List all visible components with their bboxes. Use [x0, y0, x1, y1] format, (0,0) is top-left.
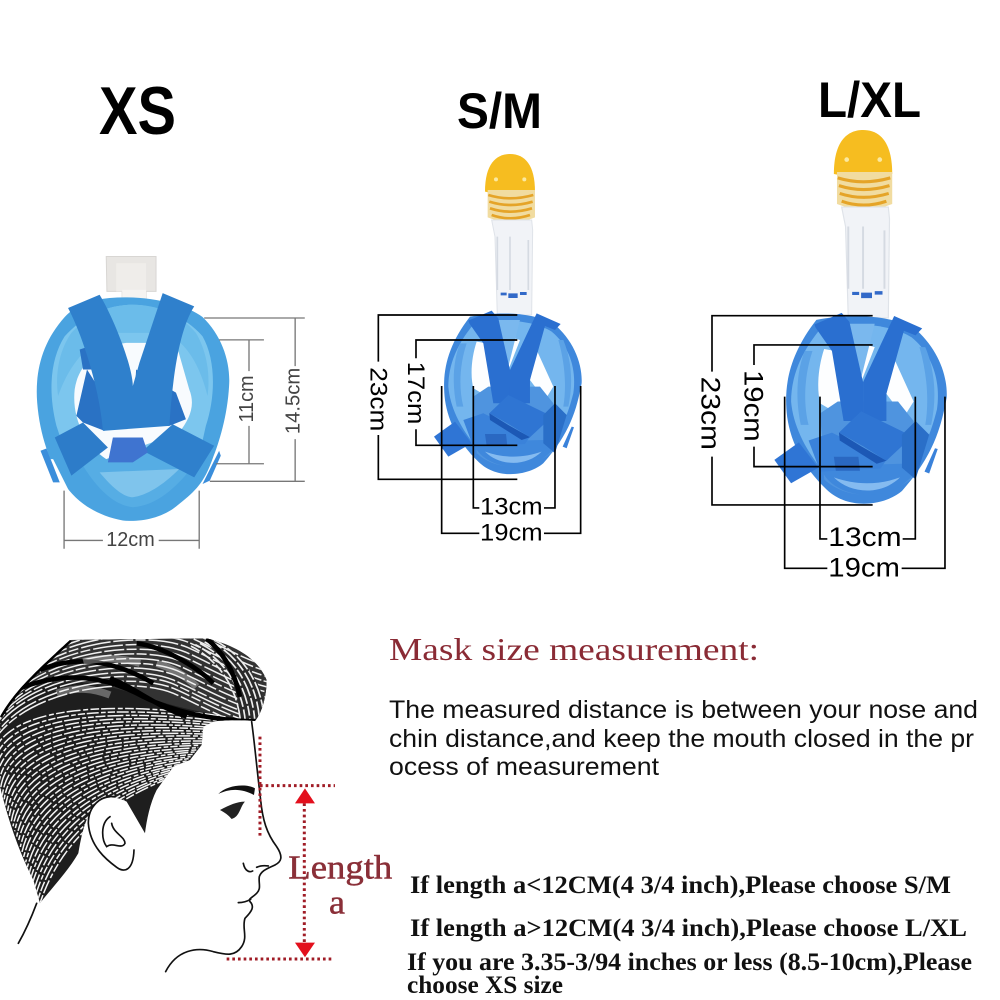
dimension: 12cm: 12cm [106, 528, 155, 551]
dimension: 13cm [473, 386, 555, 521]
text block: size choice rules [407, 872, 972, 999]
label: Length a [288, 849, 393, 921]
XS mask with gray dimensions [37, 257, 305, 551]
text block: measurement description: ocess of measurement [389, 753, 659, 781]
dimension: 11cm: 11cm [235, 375, 258, 423]
dimension: 23cm: 23cm [364, 367, 391, 431]
dimension: 14.5cm [204, 318, 305, 481]
icon: S/M full face mask [434, 154, 582, 474]
dimension: 11cm [216, 340, 264, 464]
heading: S/M: S/M [457, 83, 542, 139]
dimension: 19cm (height) [739, 345, 873, 467]
dimension: 23cm [696, 316, 873, 505]
dimension: 19cm (width) [785, 397, 945, 583]
heading: XS: XS [99, 73, 176, 149]
illustration: head profile with length a [0, 620, 393, 972]
dimension: 19cm: 19cm [480, 520, 543, 547]
S/M mask with black dimensions [364, 154, 582, 547]
icon: eyebrow and eye [218, 786, 255, 819]
icon: snorkel stub [106, 257, 156, 302]
icon: up arrow [295, 788, 315, 803]
measurement guides [227, 737, 335, 959]
dimension: 13cm: 13cm [480, 494, 543, 521]
dimension: 12cm [64, 491, 199, 551]
dimension: 17cm [402, 340, 517, 445]
dimension: 19cm (height): 19cm [739, 370, 769, 442]
L/XL dimensions [696, 316, 945, 583]
dimension: 17cm: 17cm [402, 362, 429, 424]
icon: face outline [18, 722, 281, 972]
text block: size choice rules: If length a>12CM(4 3/4 inch),Please choose L/XL [410, 915, 967, 942]
heading: Mask size measurement: Mask size measurement: [389, 631, 759, 667]
icon: XS mask body [37, 293, 229, 521]
icon: hair [0, 638, 267, 904]
label: Length a: Length [288, 849, 393, 886]
label: Length a: a [329, 884, 345, 921]
dimension: 23cm: 23cm [696, 377, 726, 450]
text block: size choice rules: choose XS size [407, 972, 563, 999]
dimension: 23cm [364, 315, 517, 479]
text block: size choice rules: If you are 3.35-3/94 inches or less (8.5-10cm),Please [407, 949, 972, 976]
heading: L/XL: L/XL [818, 72, 921, 128]
dimension: 14.5cm: 14.5cm [281, 368, 304, 434]
L/XL mask [774, 130, 947, 504]
dimension: 13cm [820, 397, 915, 552]
dimension: 19cm (width): 19cm [828, 553, 900, 583]
dimension: 13cm: 13cm [828, 522, 902, 552]
text block: measurement description: The measured distance is between your nose and [389, 696, 978, 724]
icon: down arrow [295, 943, 315, 957]
text block: size choice rules: If length a<12CM(4 3/4 inch),Please choose S/M [410, 872, 951, 899]
text block: measurement description [389, 696, 978, 781]
dimension: 19cm [442, 386, 581, 547]
text block: measurement description: chin distance,and keep the mouth closed in the pr [389, 725, 974, 753]
icon: L/XL full face mask [774, 130, 947, 504]
